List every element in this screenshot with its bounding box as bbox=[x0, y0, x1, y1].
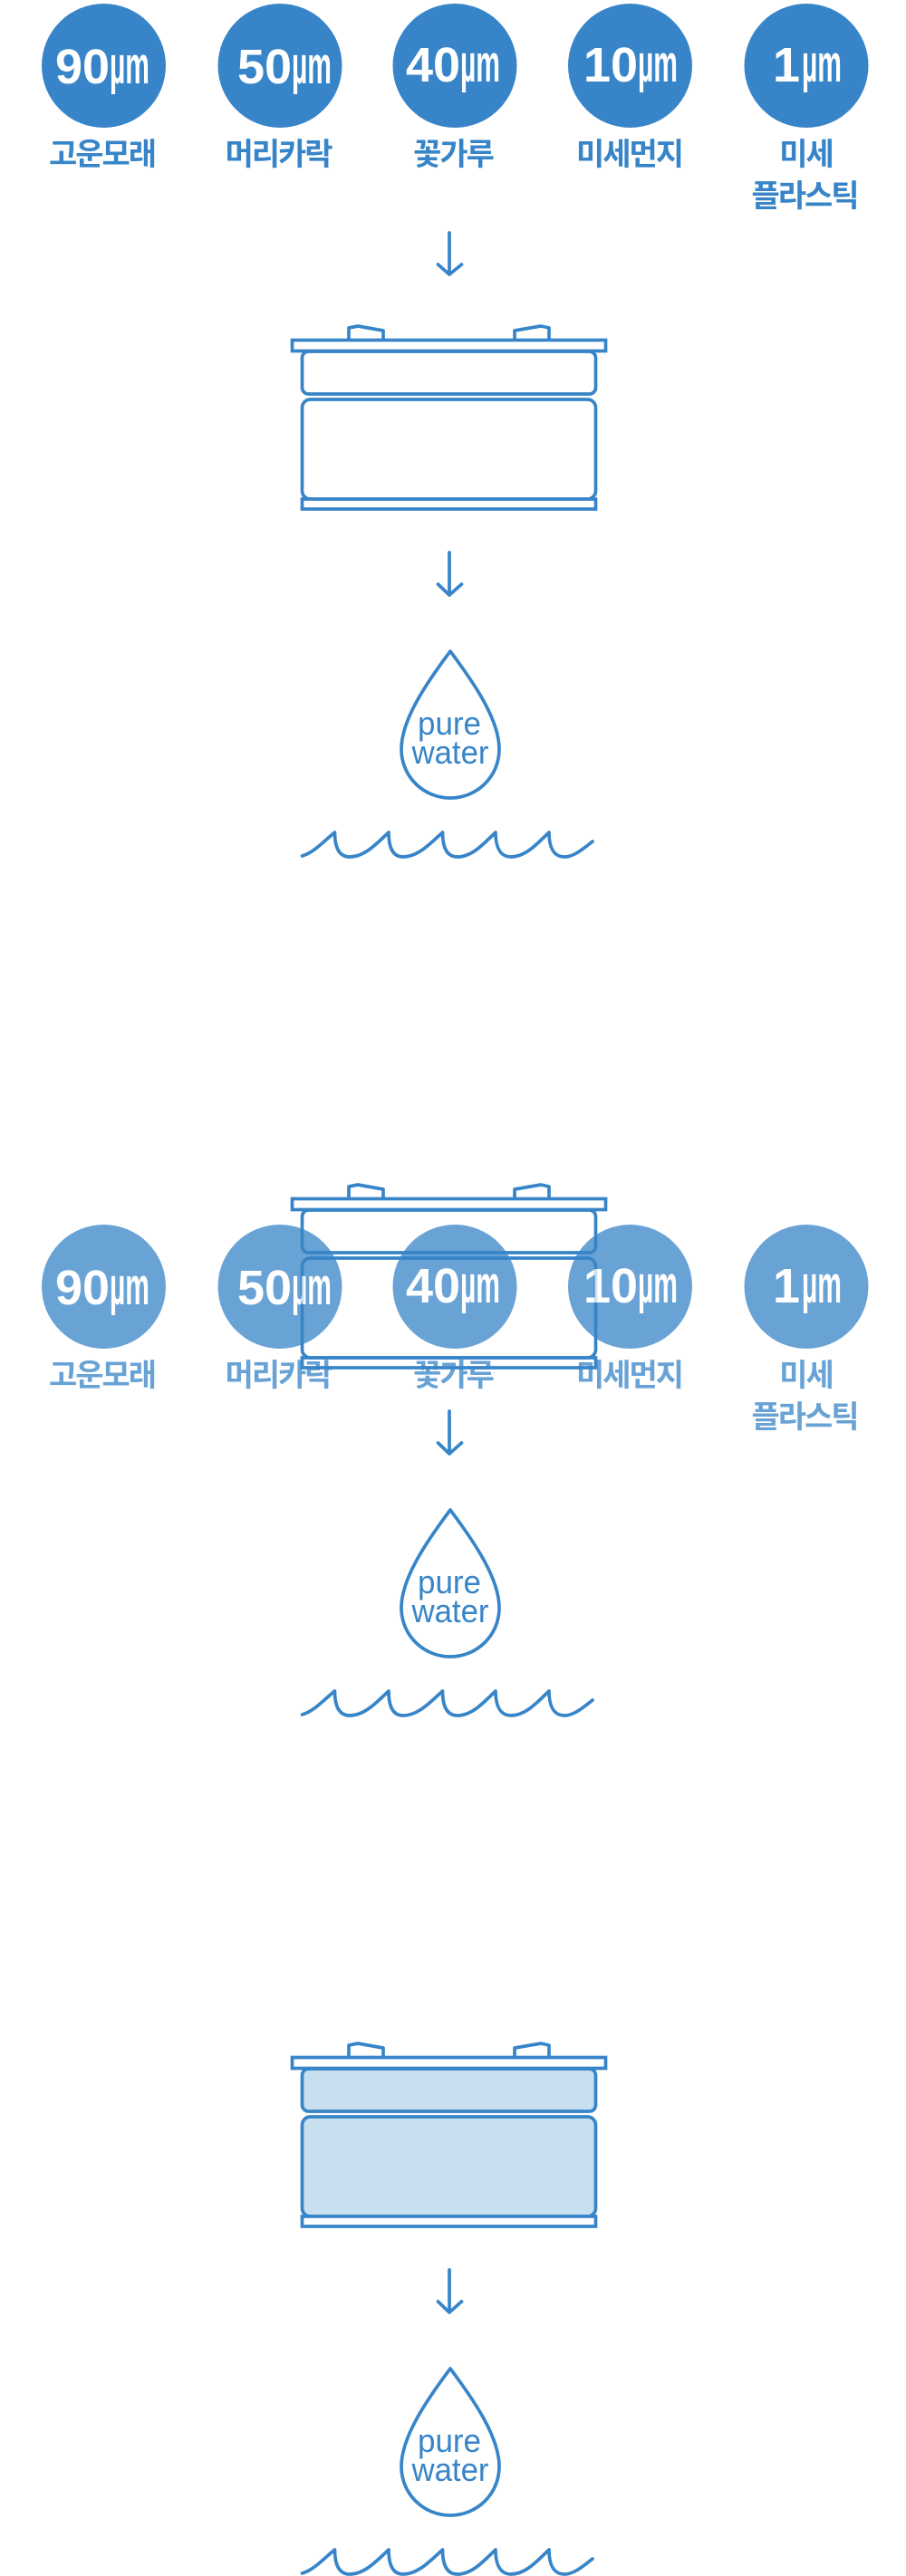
particle: 10 micrometre, fine dust: 미세먼지 bbox=[576, 1359, 682, 1393]
particle: 1 micrometre, microplastic: 1 bbox=[773, 1259, 800, 1313]
particle: 40 micrometre, pollen: 꽃가루 bbox=[413, 1359, 494, 1393]
particle: 10 micrometre, fine dust: µm bbox=[638, 1255, 678, 1314]
particle: 90 micrometre, coarse sand: 90 bbox=[55, 1261, 110, 1315]
icon: filter bbox=[292, 1185, 605, 1368]
particle: 1 micrometre, microplastic bbox=[745, 4, 868, 214]
panel: step 2, particles passing the filter bbox=[42, 1185, 868, 1716]
icon: pure water drop: pure bbox=[418, 2422, 481, 2459]
particle: 10 micrometre, fine dust: 미세먼지 bbox=[576, 138, 682, 172]
particle: 10 micrometre, fine dust: µm bbox=[638, 34, 678, 93]
particle: 40 micrometre, pollen: µm bbox=[460, 34, 500, 93]
particle: 1 micrometre, microplastic: 미세 bbox=[779, 138, 833, 172]
particle: 90 micrometre, coarse sand: 90 bbox=[55, 40, 110, 94]
particle: 40 micrometre, pollen: 40 bbox=[406, 38, 460, 92]
particle: 50 micrometre, hair: 머리카락 bbox=[225, 138, 333, 172]
particle: 50 micrometre, hair: µm bbox=[292, 36, 332, 95]
particle: 90 micrometre, coarse sand: 고운모래 bbox=[49, 1359, 155, 1393]
particle: 90 micrometre, coarse sand: µm bbox=[110, 36, 149, 95]
particle: 10 micrometre, fine dust bbox=[568, 1225, 692, 1393]
icon: pure water drop: pure bbox=[418, 1563, 481, 1600]
arrow: filter to water drop bbox=[439, 2270, 462, 2312]
icon: pure water drop: water bbox=[411, 1592, 489, 1629]
particle: 10 micrometre, fine dust: 10 bbox=[583, 1259, 638, 1313]
particle row bbox=[42, 4, 868, 214]
particle: 40 micrometre, pollen bbox=[393, 4, 516, 172]
icon: filled filter bbox=[292, 2043, 605, 2226]
particle: 90 micrometre, coarse sand bbox=[42, 4, 166, 172]
icon: pure water drop bbox=[401, 1510, 499, 1657]
particle: 1 micrometre, microplastic: 미세 bbox=[779, 1359, 833, 1393]
particle: 40 micrometre, pollen: 40 bbox=[406, 1259, 460, 1313]
particle row, semi-transparent bbox=[42, 1225, 868, 1435]
icon: pure water drop: water bbox=[411, 2451, 489, 2488]
particle: 1 micrometre, microplastic: 플라스틱 bbox=[751, 1400, 858, 1435]
particle: 1 micrometre, microplastic bbox=[745, 1225, 868, 1435]
panel: step 1, particles above the filter bbox=[42, 4, 868, 857]
icon: water waves bbox=[303, 1691, 593, 1716]
particle: 1 micrometre, microplastic: µm bbox=[802, 34, 842, 93]
icon: pure water drop bbox=[401, 651, 499, 798]
particle: 10 micrometre, fine dust bbox=[568, 4, 692, 172]
particle: 90 micrometre, coarse sand: µm bbox=[110, 1257, 149, 1316]
particle: 50 micrometre, hair: µm bbox=[292, 1257, 332, 1316]
icon: water waves bbox=[303, 832, 593, 857]
particle: 40 micrometre, pollen: µm bbox=[460, 1255, 500, 1314]
particle: 90 micrometre, coarse sand bbox=[42, 1225, 166, 1393]
particle: 40 micrometre, pollen bbox=[393, 1225, 516, 1393]
particle: 90 micrometre, coarse sand: 고운모래 bbox=[49, 138, 155, 172]
particle: 50 micrometre, hair: 50 bbox=[237, 40, 292, 94]
icon: pure water drop: pure bbox=[418, 705, 481, 742]
particle: 50 micrometre, hair bbox=[217, 4, 342, 172]
particle: 50 micrometre, hair bbox=[217, 1225, 342, 1393]
particle: 40 micrometre, pollen: 꽃가루 bbox=[413, 138, 494, 172]
particle: 1 micrometre, microplastic: µm bbox=[802, 1255, 842, 1314]
icon: pure water drop: water bbox=[411, 734, 489, 771]
icon: pure water drop bbox=[401, 2369, 499, 2515]
arrow: filter to water drop bbox=[439, 553, 462, 595]
particle: 10 micrometre, fine dust: 10 bbox=[583, 38, 638, 92]
particle: 50 micrometre, hair: 머리카락 bbox=[225, 1359, 333, 1393]
panel: step 3, filter saturated with particles bbox=[292, 2043, 605, 2574]
arrow: filter to water drop bbox=[439, 1411, 462, 1454]
particle: 50 micrometre, hair: 50 bbox=[237, 1261, 292, 1315]
arrow: particles into filter bbox=[439, 233, 462, 274]
icon: water waves bbox=[303, 2550, 593, 2574]
particle: 1 micrometre, microplastic: 1 bbox=[773, 38, 800, 92]
icon: filter bbox=[292, 326, 605, 509]
particle: 1 micrometre, microplastic: 플라스틱 bbox=[751, 179, 858, 214]
